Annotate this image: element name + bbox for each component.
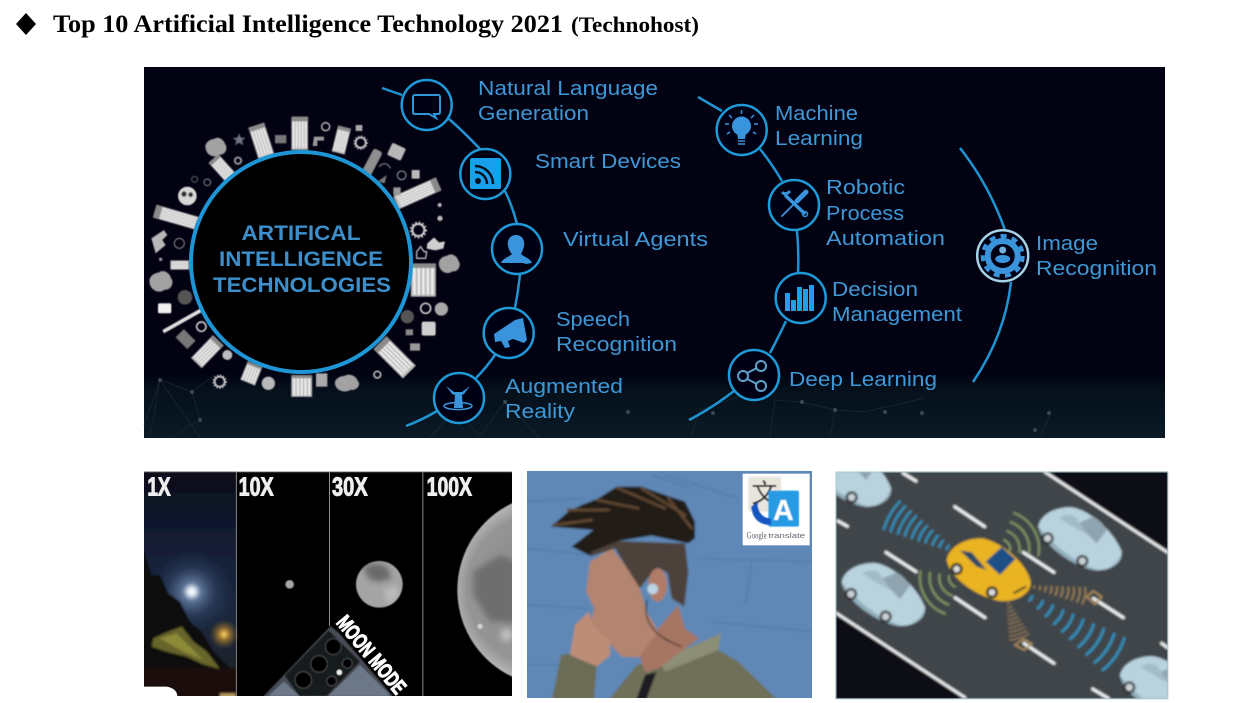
icon: diamond bullet	[16, 13, 36, 35]
panel: autonomous car sensors illustration	[836, 472, 1168, 700]
illustration: ring of grey city and tech icons	[149, 117, 460, 397]
person: neck and face	[570, 548, 699, 672]
label: natural language generation: Generation	[478, 103, 589, 125]
label: robotic process automation: Robotic	[826, 177, 905, 199]
label: decision management: Decision	[832, 279, 918, 301]
node: decision management	[776, 273, 962, 326]
yellow car	[947, 538, 1031, 601]
title source text: (Technohost)	[571, 12, 699, 37]
icon: person with check	[501, 235, 532, 264]
icon: light bulb	[725, 110, 758, 144]
corner notch	[144, 687, 177, 696]
panel: moon mode zoom photo	[144, 472, 512, 696]
node: machine learning	[717, 103, 863, 155]
label: decision management: Management	[832, 304, 962, 326]
label: smart devices: Smart Devices	[535, 151, 681, 173]
dividers between zoom levels	[236, 472, 423, 696]
icon: gear with person	[983, 236, 1023, 276]
icon: figure in portal	[444, 386, 472, 410]
other cars	[836, 472, 1168, 699]
node: speech recognition	[484, 308, 677, 358]
title	[16, 11, 699, 38]
label: speech recognition: Recognition	[556, 334, 677, 356]
icon: share nodes	[738, 361, 766, 391]
logo: google translate: A	[773, 495, 794, 527]
icon: wrench and screwdriver	[782, 192, 808, 216]
label: virtual agents: Virtual Agents	[563, 229, 708, 251]
node: smart devices	[460, 149, 681, 199]
label: augmented reality: Reality	[505, 401, 575, 423]
lane markings	[837, 472, 1168, 698]
node: robotic process automation	[769, 177, 945, 250]
label: speech recognition	[556, 309, 677, 356]
photo: night sky with tree	[144, 472, 238, 696]
connector arcs	[382, 88, 1011, 426]
label: natural language generation	[478, 78, 658, 125]
logo: google translate: translate	[768, 531, 805, 540]
road shoulders	[836, 472, 1168, 699]
panel: AI technologies diagram	[144, 67, 1165, 438]
photo: phone camera module	[263, 626, 394, 696]
icon: bar chart	[785, 285, 814, 311]
person: hair	[551, 487, 695, 607]
node: virtual agents	[492, 224, 708, 274]
central heading: ARTIFICAL	[242, 222, 361, 245]
central circle	[191, 152, 411, 372]
title main text: Top 10 Artificial Intelligence Technology 2021	[53, 11, 563, 38]
label: deep learning: Deep Learning	[789, 369, 937, 391]
logo: google translate	[743, 473, 810, 545]
logo: google translate: 文	[751, 473, 777, 510]
photo: thirty times moon	[356, 561, 403, 608]
icon: rss square	[470, 158, 501, 189]
label: image recognition: Recognition	[1036, 258, 1157, 280]
node: deep learning	[729, 350, 937, 400]
photo: ten times moon	[285, 580, 294, 589]
label: robotic process automation: Process	[826, 203, 904, 225]
zoom labels: 100X	[427, 472, 472, 502]
sensor waves	[882, 500, 1127, 672]
zoom labels: 10X	[239, 472, 274, 502]
zoom labels: 1X	[147, 472, 171, 502]
label: machine learning: Machine	[775, 103, 858, 125]
photo: hundred times moon	[456, 502, 512, 678]
label: augmented reality	[505, 376, 623, 423]
zoom labels	[148, 476, 472, 496]
person: sleeve and shirt	[551, 633, 777, 698]
central heading: INTELLIGENCE	[219, 248, 383, 271]
central heading: TECHNOLOGIES	[213, 274, 391, 297]
node: augmented reality	[434, 373, 623, 423]
label: augmented reality: Augmented	[505, 376, 623, 398]
label: robotic process automation: Automation	[826, 228, 945, 250]
label: image recognition	[1036, 233, 1157, 280]
label: decision management	[832, 279, 962, 326]
node: natural language generation	[402, 78, 658, 130]
label: machine learning	[775, 103, 863, 150]
person: ear and earbud	[646, 568, 682, 647]
label: robotic process automation	[826, 177, 945, 250]
icon: megaphone	[494, 318, 527, 348]
panel: translation earbuds photo	[527, 471, 812, 698]
node: image recognition	[977, 230, 1157, 281]
label: natural language generation: Natural Language	[478, 78, 658, 100]
label: machine learning: Learning	[775, 128, 863, 150]
label: speech recognition: Speech	[556, 309, 630, 331]
central heading	[213, 222, 391, 297]
zoom labels: 30X	[332, 472, 368, 502]
label: image recognition: Image	[1036, 233, 1098, 255]
logo: google translate: Google	[747, 531, 767, 541]
icon: chat bubble	[413, 95, 440, 118]
